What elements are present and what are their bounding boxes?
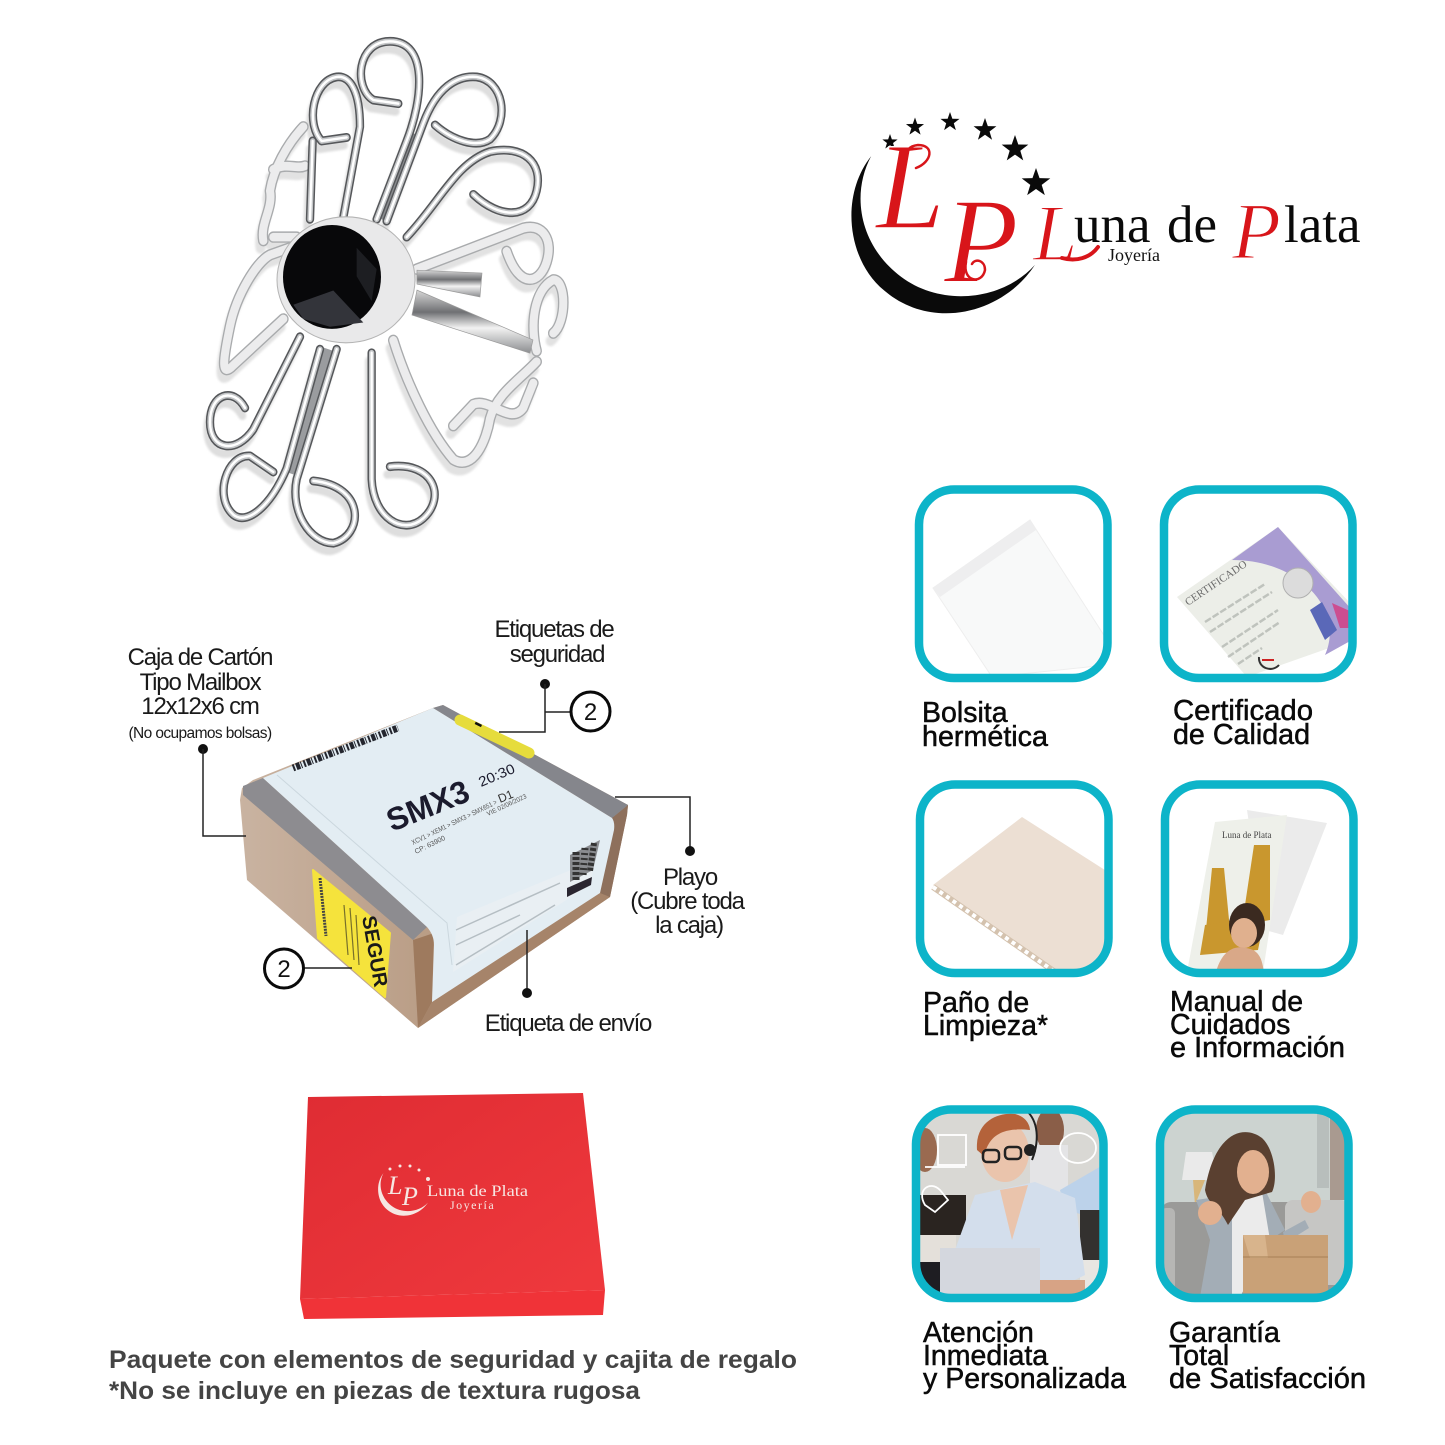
label: hermética: [922, 721, 1048, 753]
box lid: [300, 1093, 605, 1299]
wordmark: lata: [1284, 196, 1360, 254]
QR code: [570, 840, 600, 882]
panel: Bolsita hermética: [919, 490, 1108, 753]
label: y Personalizada: [923, 1363, 1126, 1395]
red gift box: [300, 1093, 605, 1319]
callout: Caja de Cartón: [128, 644, 272, 836]
icon: cleaning cloth: [933, 817, 1108, 972]
label: [1173, 695, 1313, 751]
stars: [882, 112, 1050, 195]
callout: Playo: [615, 797, 746, 939]
shipping box diagram: [128, 616, 746, 1037]
callout: Etiquetas de seguridad: 2: [584, 699, 597, 726]
ring photo: [207, 41, 563, 551]
shipping label: CP: 63900: [414, 835, 447, 856]
icon: certificate card: CERTIFICADO: [1183, 558, 1249, 608]
panel: Manual de Cuidados: [1165, 784, 1354, 1064]
top yellow security label: [460, 720, 529, 753]
monogram LP: L: [874, 118, 945, 255]
callout: Playo: la caja): [655, 912, 723, 939]
label: de Satisfacción: [1169, 1363, 1366, 1395]
label: [1169, 1317, 1366, 1395]
tagline: Joyería: [1108, 245, 1160, 265]
callout: side label count: 2: [277, 956, 291, 983]
shipping label: D1: [496, 787, 516, 806]
panel: Certificado de Calidad: [1164, 490, 1352, 751]
label: de Calidad: [1173, 719, 1310, 751]
icon: clear bag: [933, 520, 1107, 677]
callout: Caja de Cartón: (No ocupamos bolsas): [128, 725, 272, 742]
shipping label: XCV1 > XEM1 > SMX3 > SMX651 >: [411, 799, 498, 847]
label: Limpieza*: [923, 1010, 1048, 1042]
ring band: [412, 270, 533, 353]
label: e Información: [1170, 1032, 1345, 1064]
footer note: *No se incluye en piezas de textura rugosa: [109, 1377, 641, 1405]
callout: Etiqueta de envío: Etiqueta de envío: [485, 1010, 652, 1037]
label: [923, 1317, 1126, 1395]
monogram LP: P: [943, 174, 1019, 309]
gift box logo: Luna de Plata: [427, 1183, 528, 1200]
label: Manual de: [1170, 986, 1303, 1018]
label: [923, 987, 1048, 1042]
label: Paño de: [923, 987, 1029, 1019]
photo: customer unboxing: [1161, 1110, 1348, 1297]
callout: Caja de Cartón: Tipo Mailbox: [140, 669, 262, 696]
wordmark: [1032, 188, 1360, 278]
callout: side label count: [264, 949, 352, 988]
black faceted stone: [283, 225, 381, 329]
stone bezel: [277, 217, 415, 343]
label: Cuidados: [1170, 1009, 1290, 1041]
label text: SMX3: [381, 773, 474, 838]
callout: Playo: Playo: [663, 864, 718, 891]
ring shadow: [207, 49, 561, 551]
side yellow security label: SEGUR: [357, 914, 391, 989]
box front flap: [300, 1290, 605, 1319]
barcode: [293, 728, 398, 768]
shipping label: [263, 708, 614, 1002]
callout: Etiquetas de seguridad: [494, 616, 614, 732]
callout: Etiqueta de envío: [485, 930, 652, 1037]
panel: Atención Inmediata: [913, 1108, 1126, 1395]
callout: Caja de Cartón: Caja de Cartón: [128, 644, 272, 671]
label: Garantía: [1169, 1317, 1280, 1349]
icon: certificate card: [1177, 527, 1352, 677]
label: [1170, 986, 1345, 1064]
label: Inmediata: [923, 1340, 1048, 1372]
label: [922, 697, 1048, 753]
label: Bolsita: [922, 697, 1008, 729]
ring wires: [210, 41, 563, 543]
callout: Caja de Cartón: 12x12x6 cm: [141, 693, 259, 720]
monogram LP: [874, 118, 1019, 309]
gift box logo: P: [401, 1182, 418, 1211]
wordmark: P: [1231, 188, 1281, 276]
shipping label: 20:30: [476, 760, 517, 790]
label: Certificado: [1173, 695, 1313, 727]
callout: Playo: (Cubre toda: [630, 888, 746, 915]
wordmark: L: [1032, 190, 1078, 278]
gift box logo: [378, 1164, 528, 1216]
callout: Etiquetas de seguridad: Etiquetas de: [494, 616, 614, 643]
wordmark: una: [1074, 196, 1151, 254]
callout: Etiquetas de seguridad: seguridad: [510, 641, 604, 668]
label: Total: [1169, 1340, 1229, 1372]
icon: brochures: [1187, 810, 1327, 972]
gift box logo: L: [387, 1171, 402, 1200]
box body: [240, 705, 628, 1028]
footer note: Paquete con elementos de seguridad y cajita de regalo: [109, 1346, 797, 1374]
footer note: [109, 1346, 797, 1405]
label: Atención: [923, 1317, 1034, 1349]
photo: support agent: [920, 1114, 1100, 1294]
side yellow security label: [313, 870, 391, 997]
logo: Luna de Plata: [851, 112, 1360, 313]
panel: Garantía Total: [1160, 1110, 1366, 1395]
shipping label: VIE 02/06/2023: [486, 793, 528, 818]
gift box logo: Joyería: [450, 1198, 495, 1212]
icon: brochures: Luna de Plata: [1222, 830, 1271, 840]
panel: Paño de Limpieza: [920, 784, 1108, 1042]
crescent moon: [851, 156, 1035, 313]
wordmark: de: [1167, 196, 1217, 254]
